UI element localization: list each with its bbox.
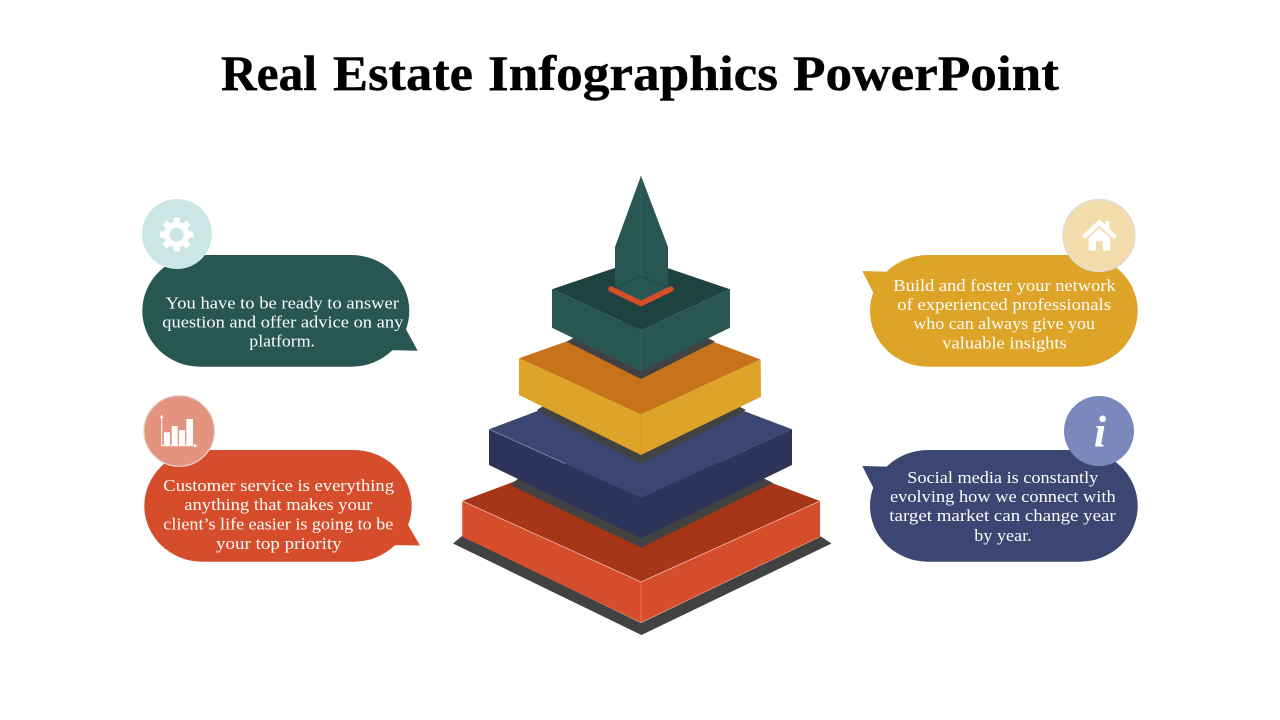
base shadow bbox=[453, 536, 832, 635]
icon badge: gear bbox=[142, 199, 212, 269]
callout text bbox=[889, 468, 1116, 545]
callout text bbox=[162, 293, 404, 351]
chart: stacked isometric building pyramid bbox=[453, 176, 832, 635]
callout text: Customer service is everything bbox=[163, 476, 394, 495]
callout text: valuable insights bbox=[942, 334, 1067, 353]
callout text: target market can change year bbox=[889, 506, 1116, 525]
layer 4: red block bbox=[462, 434, 820, 623]
speech bubble bbox=[862, 450, 1138, 562]
icon badge: info: i bbox=[1094, 407, 1107, 456]
callout text: client’s life easier is going to be bbox=[163, 514, 394, 533]
title: PowerPoint bbox=[793, 45, 1059, 101]
callout text: platform. bbox=[249, 332, 315, 351]
panel: blue callout bbox=[862, 396, 1138, 562]
layer 3: blue block bbox=[489, 372, 792, 538]
callout text: who can always give you bbox=[913, 314, 1095, 333]
red chevron marker bbox=[611, 289, 671, 304]
callout text: of experienced professionals bbox=[897, 295, 1111, 314]
callout text: Social media is constantly bbox=[907, 468, 1099, 487]
speech bubble bbox=[142, 255, 418, 367]
title: Infographics bbox=[488, 45, 778, 101]
callout text bbox=[163, 476, 394, 553]
icon badge: house bbox=[1063, 200, 1135, 272]
panel: teal callout bbox=[142, 199, 418, 367]
layer 2: yellow block bbox=[519, 315, 761, 455]
callout text: Build and foster your network bbox=[893, 276, 1116, 295]
title: Real bbox=[221, 45, 317, 101]
callout text: evolving how we connect with bbox=[890, 487, 1116, 506]
speech bubble bbox=[144, 450, 420, 562]
callout text bbox=[893, 276, 1116, 353]
panel: yellow callout bbox=[862, 200, 1138, 367]
layer 1: teal block bbox=[552, 259, 730, 371]
callout text: You have to be ready to answer bbox=[166, 293, 399, 312]
callout text: by year. bbox=[974, 526, 1032, 545]
speech bubble bbox=[862, 255, 1138, 367]
spire bbox=[615, 176, 668, 300]
shadow under teal block bbox=[567, 337, 715, 379]
title: Estate bbox=[333, 45, 473, 101]
icon badge: info bbox=[1064, 396, 1134, 466]
callout text: question and offer advice on any bbox=[162, 312, 404, 331]
shadow under yellow block bbox=[537, 405, 746, 464]
callout text: your top priority bbox=[216, 534, 342, 553]
callout text: anything that makes your bbox=[184, 495, 373, 514]
title bbox=[221, 45, 1059, 101]
icon badge: bar chart bbox=[144, 396, 214, 466]
panel: red callout bbox=[144, 396, 420, 562]
shadow under blue block bbox=[510, 478, 773, 548]
